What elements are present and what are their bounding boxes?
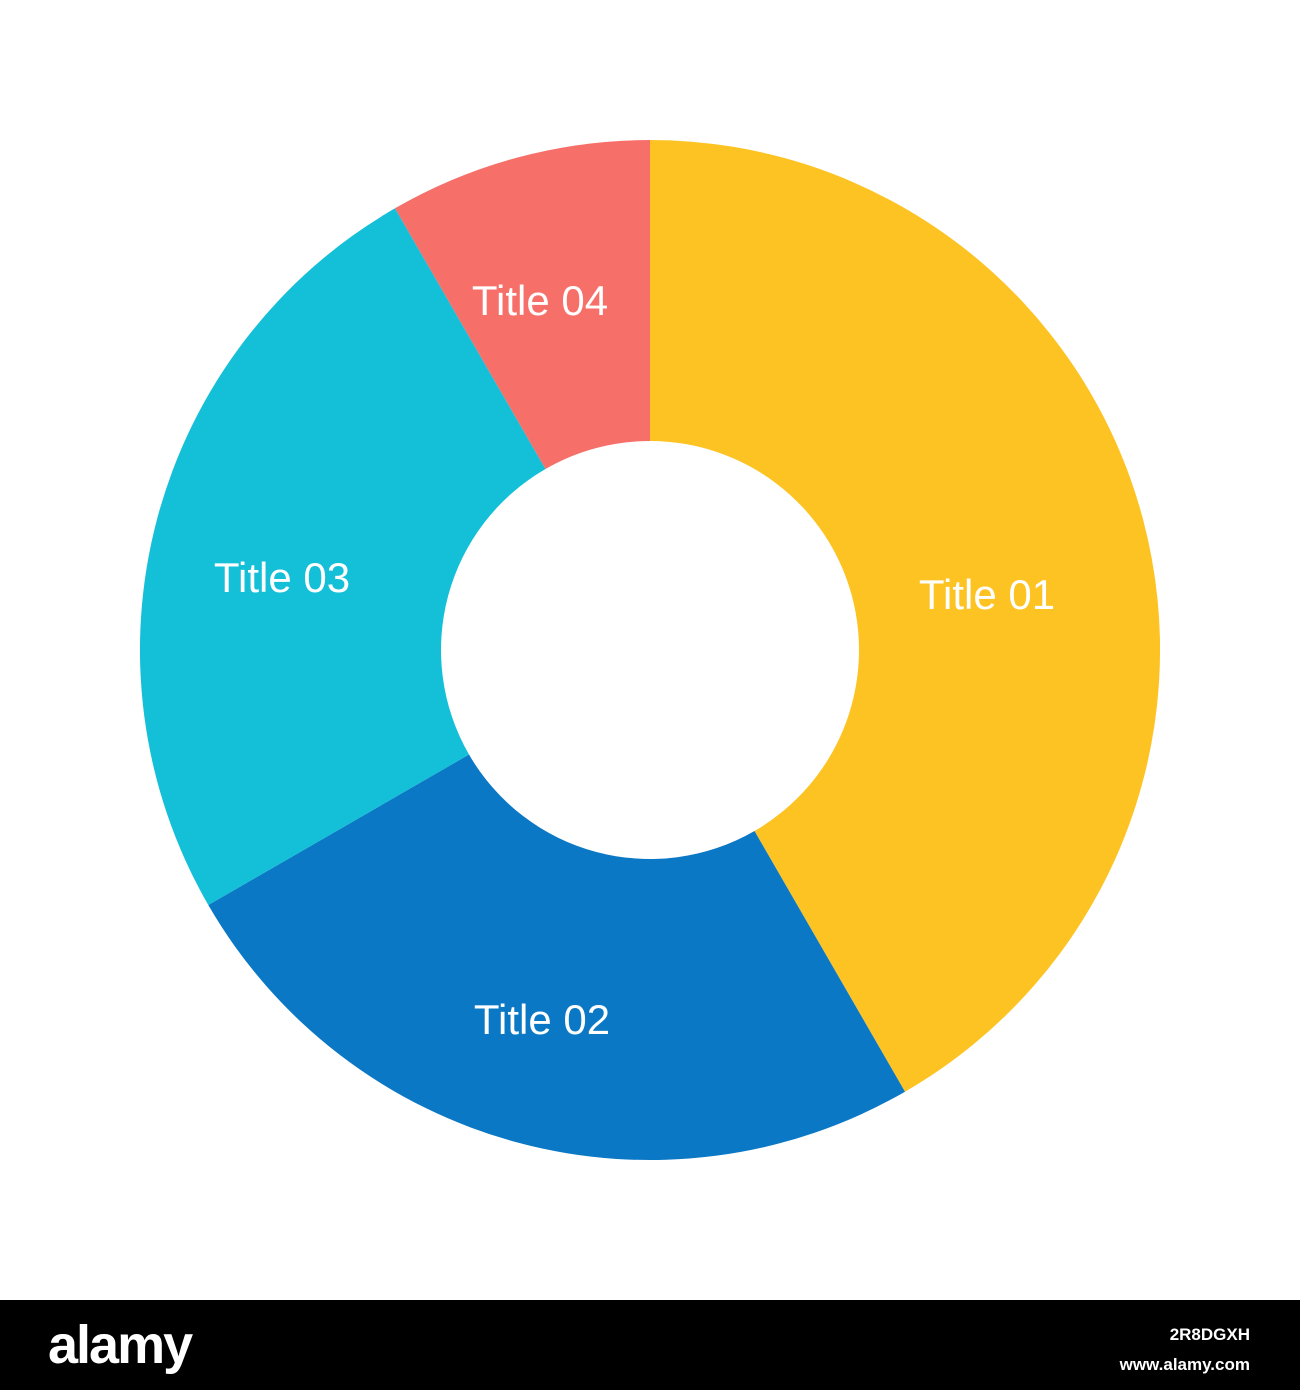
segment: Title 01 <box>650 140 1160 1092</box>
footer id text: www.alamy.com <box>1120 1355 1250 1374</box>
label: Title 01: Title 01 <box>919 571 1055 618</box>
label: Title 03: Title 03 <box>214 554 350 601</box>
segment: Title 02 <box>208 754 905 1160</box>
segment: Title 04 <box>395 140 650 469</box>
label: Title 04: Title 04 <box>472 277 608 324</box>
footer bar <box>0 1300 1300 1390</box>
footer id text: 2R8DGXH <box>1170 1325 1250 1344</box>
footer id text <box>1120 1325 1250 1374</box>
label: Title 02: Title 02 <box>474 996 610 1043</box>
segment: Title 03 <box>140 208 546 905</box>
footer logo: alamy <box>48 1315 191 1375</box>
